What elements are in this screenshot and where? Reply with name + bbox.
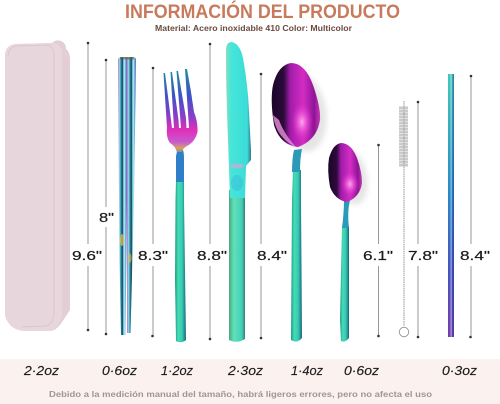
dimension line: straw 8.4 (459, 75, 491, 338)
weights row: 1·4oz (291, 363, 323, 378)
fork (164, 69, 198, 342)
footer note: Debido a la medición manual del tamaño, habrá ligeros errores, pero no afecta el uso (49, 389, 432, 399)
dimension line: knife 8.8 (196, 43, 228, 340)
dimension line: chopsticks 8 (98, 59, 115, 335)
knife (226, 42, 251, 342)
large spoon (271, 63, 333, 342)
dimension line: brush 7.8 (407, 101, 439, 338)
small spoon (328, 143, 372, 342)
dimension line: chopsticks 8: 8" (99, 211, 114, 225)
weights row (23, 363, 478, 378)
dimension line: case 9.6: 9.6" (72, 249, 102, 263)
subtitle: Material: Acero inoxidable 410 Color: Multicolor (155, 23, 353, 33)
dimension line: fork 8.3: 8.3" (138, 249, 168, 263)
chopsticks (118, 57, 136, 335)
weights row: 2·3oz (227, 363, 264, 378)
dimension line: straw 8.4: 8.4" (460, 249, 490, 263)
dimension line: knife 8.8: 8.8" (197, 249, 227, 263)
dimension line: small spoon 6.1: 6.1" (363, 249, 393, 263)
dimension line: small spoon 6.1 (362, 144, 394, 337)
dimension line: spoon 8.4: 8.4" (257, 249, 287, 263)
weights row: 0·6oz (102, 363, 138, 378)
dimension line: spoon 8.4 (256, 73, 288, 339)
title: INFORMACIÓN DEL PRODUCTO (125, 1, 400, 23)
straw (448, 74, 454, 337)
case (5, 40, 70, 331)
dimension line: brush 7.8: 7.8" (408, 249, 438, 263)
weights row: 0·6oz (344, 363, 380, 378)
cleaning brush (399, 101, 409, 337)
bottom band (0, 359, 500, 404)
weights row: 0·3oz (442, 363, 478, 378)
weights row: 1·2oz (161, 363, 193, 378)
dimension line: fork 8.3 (137, 67, 169, 337)
dimension line: case 9.6 (71, 42, 104, 331)
weights row: 2·2oz (23, 363, 60, 378)
